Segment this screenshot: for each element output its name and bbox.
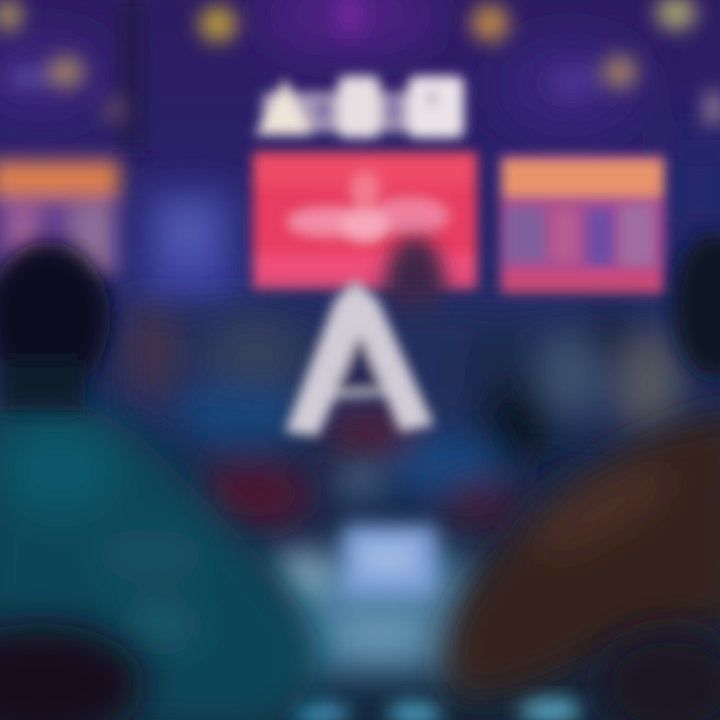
- person left: teal jacket: [0, 398, 320, 720]
- foreground dark shoulder lower left: [0, 623, 145, 720]
- table and laptop glow: [272, 464, 475, 675]
- laptop: [342, 525, 438, 597]
- person right: head silhouette: [674, 233, 720, 377]
- bottom edge lights: [290, 697, 582, 720]
- right screen: [500, 155, 665, 295]
- foreground dark lower right: [598, 629, 720, 720]
- centre blue panel: [145, 190, 235, 310]
- audience midground band: [120, 304, 682, 531]
- dark vertical truss: [120, 0, 144, 150]
- person right: brown jacket: [444, 410, 720, 696]
- headline sign: white blurred letters: [255, 76, 464, 138]
- main red screen: [253, 152, 477, 290]
- top stage lights: [0, 0, 720, 126]
- person left: head silhouette: [0, 242, 110, 410]
- speaker silhouette in front of screen: [385, 237, 445, 333]
- left screen: [0, 158, 120, 278]
- backdrop colour washes: [0, 0, 720, 240]
- white triangle logo: [285, 280, 434, 436]
